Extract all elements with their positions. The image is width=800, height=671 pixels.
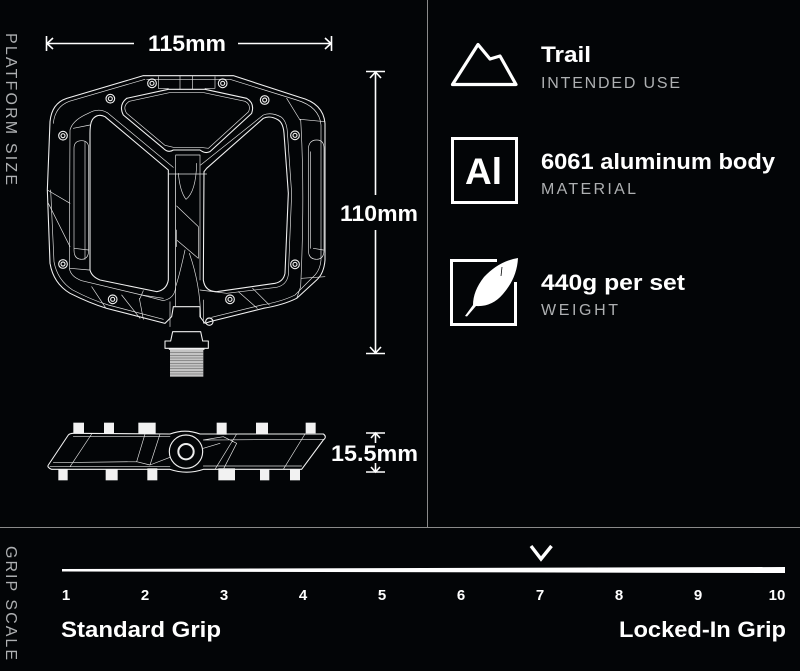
left frame contour — [69, 110, 176, 301]
label: platform size: PLATFORM SIZE — [2, 33, 19, 185]
scale label: locked-in grip: Locked-In Grip — [619, 617, 786, 642]
grip scale numbers: 6 — [457, 587, 465, 604]
icon: aluminum element box: Al — [465, 151, 502, 192]
side body outline — [48, 431, 325, 472]
spec: weight — [541, 270, 686, 319]
side body detail lines — [50, 434, 323, 469]
dimension: width 115mm: 115mm — [148, 31, 226, 56]
scale label: standard grip: Standard Grip — [61, 617, 221, 642]
axle thread — [170, 350, 203, 377]
top window — [121, 89, 253, 153]
icon: aluminum element box — [452, 138, 516, 202]
pedal side view line drawing — [48, 423, 325, 480]
grip scale numbers: 1 — [62, 587, 70, 604]
right foot window — [203, 117, 288, 292]
grip scale numbers: 8 — [615, 587, 623, 604]
axle hub — [169, 435, 203, 468]
grip scale bar — [62, 567, 785, 573]
grip scale numbers: 3 — [220, 587, 228, 604]
grip scale numbers: 4 — [299, 587, 308, 604]
grip scale numbers: 7 — [536, 587, 544, 604]
dimension: thickness 15.5mm: 15.5mm — [331, 441, 418, 466]
spec: material — [541, 149, 776, 198]
grip scale numbers: 5 — [378, 587, 386, 604]
top band between screws — [158, 76, 215, 89]
dimension: thickness 15.5mm — [331, 433, 418, 472]
right frame contour — [200, 114, 292, 293]
spec: intended use: Trail — [541, 42, 591, 67]
pedal outer outline — [47, 76, 325, 323]
grip scale numbers: 10 — [769, 587, 785, 604]
dimension: length 110mm: 110mm — [340, 201, 418, 226]
dimension: width 115mm — [46, 31, 332, 56]
marker: grip rating 7 — [531, 546, 552, 559]
icon: feather weight box — [452, 258, 518, 324]
spec: material: 6061 aluminum body — [541, 149, 776, 174]
spec: material: MATERIAL — [541, 181, 636, 198]
grip scale numbers: 9 — [694, 587, 702, 604]
bottom rail accents — [70, 268, 269, 319]
axle collar — [165, 332, 208, 349]
grip scale numbers: 2 — [141, 587, 149, 604]
pedal top view line drawing — [47, 76, 325, 377]
right contours and slots — [287, 98, 325, 298]
spec: intended use: INTENDED USE — [541, 75, 680, 92]
spec: weight: 440g per set — [541, 270, 686, 295]
top pins — [73, 423, 316, 435]
icon: mountain — [452, 44, 516, 84]
pins screw holes — [59, 79, 299, 325]
left contours and slots — [47, 125, 90, 259]
spec: intended use — [541, 42, 680, 92]
label: grip scale: GRIP SCALE — [2, 546, 19, 660]
bottom pins — [58, 468, 300, 480]
grip scale numbers — [62, 587, 785, 604]
dimension: length 110mm — [340, 72, 418, 354]
spec: weight: WEIGHT — [541, 302, 618, 319]
pedal secondary contour — [51, 79, 321, 319]
centre spine — [168, 155, 207, 327]
left foot window — [90, 115, 168, 292]
